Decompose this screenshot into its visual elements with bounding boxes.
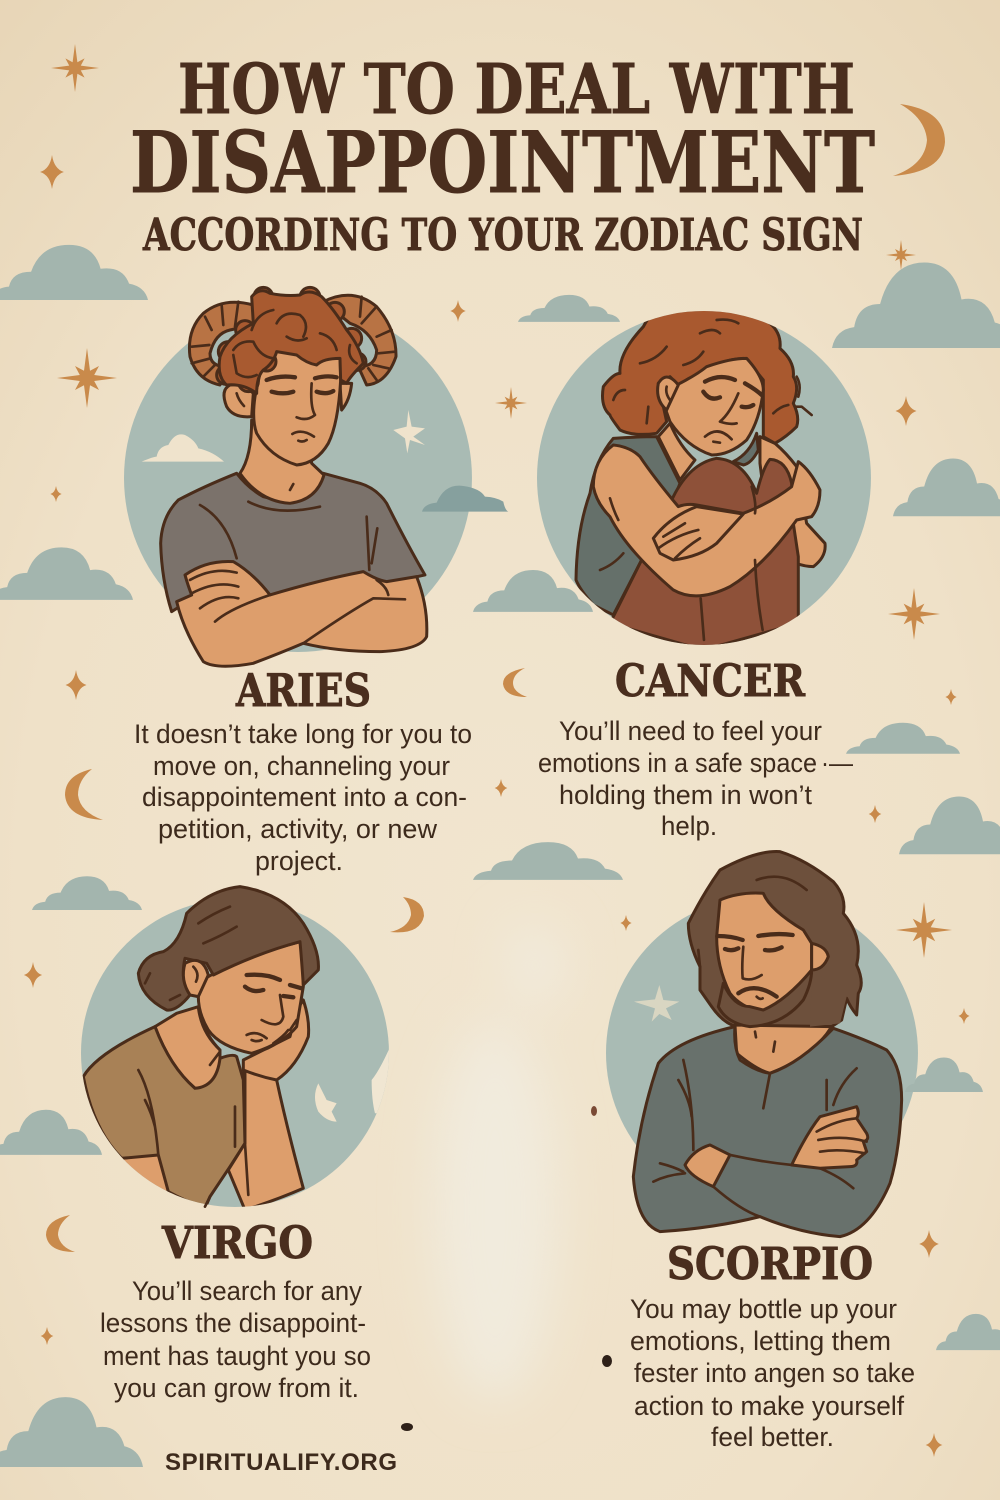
text: Aries: [134, 719, 472, 876]
text: Virgo: ment has taught you so: [103, 1341, 371, 1371]
specks: [401, 1106, 612, 1431]
figure: Virgo: [81, 887, 403, 1210]
heading: Virgo: VIRGO: [161, 1218, 313, 1269]
text: Scorpio: [630, 1294, 915, 1452]
heading: Aries: ARIES: [235, 664, 371, 717]
heading: Scorpio: SCORPIO: [667, 1239, 873, 1290]
text: Aries: disappointement into a con-: [142, 782, 467, 812]
text: Scorpio: You may bottle up your: [630, 1294, 897, 1324]
text: Aries: move on, channeling your: [153, 751, 450, 781]
moons: [46, 104, 945, 1252]
text: Cancer: ·—: [821, 748, 853, 778]
text: Cancer: [538, 716, 853, 841]
title: [130, 50, 875, 261]
text: Cancer: emotions in a safe space: [538, 748, 817, 778]
text: Virgo: lessons the disappoint-: [100, 1308, 366, 1338]
text: Virgo: [100, 1276, 371, 1403]
text: Cancer: You’ll need to feel your: [559, 716, 822, 746]
figure: Cancer: [537, 296, 871, 650]
text: Aries: It doesn’t take long for you to: [134, 719, 472, 749]
title: HOW TO DEAL WITH: [178, 50, 855, 130]
text: Cancer: help.: [661, 811, 717, 841]
heading: Cancer: CANCER: [615, 656, 805, 707]
text: Virgo: You’ll search for any: [132, 1276, 362, 1306]
text: Scorpio: feel better.: [711, 1422, 834, 1452]
text: Scorpio: fester into angen so take: [634, 1358, 915, 1388]
text: Scorpio: action to make yourself: [634, 1391, 904, 1421]
faded patch: [433, 925, 563, 1400]
text: Aries: petition, activity, or new: [158, 814, 437, 844]
text: Cancer: holding them in won’t: [559, 780, 812, 810]
text: Scorpio: emotions, letting them: [630, 1326, 891, 1356]
footer: SPIRITUALIFY.ORG: [165, 1449, 397, 1476]
text: Virgo: you can grow from it.: [114, 1373, 359, 1403]
figure: Scorpio: [606, 852, 983, 1237]
text: Aries: project.: [255, 846, 343, 876]
figure: Aries: [124, 287, 508, 666]
